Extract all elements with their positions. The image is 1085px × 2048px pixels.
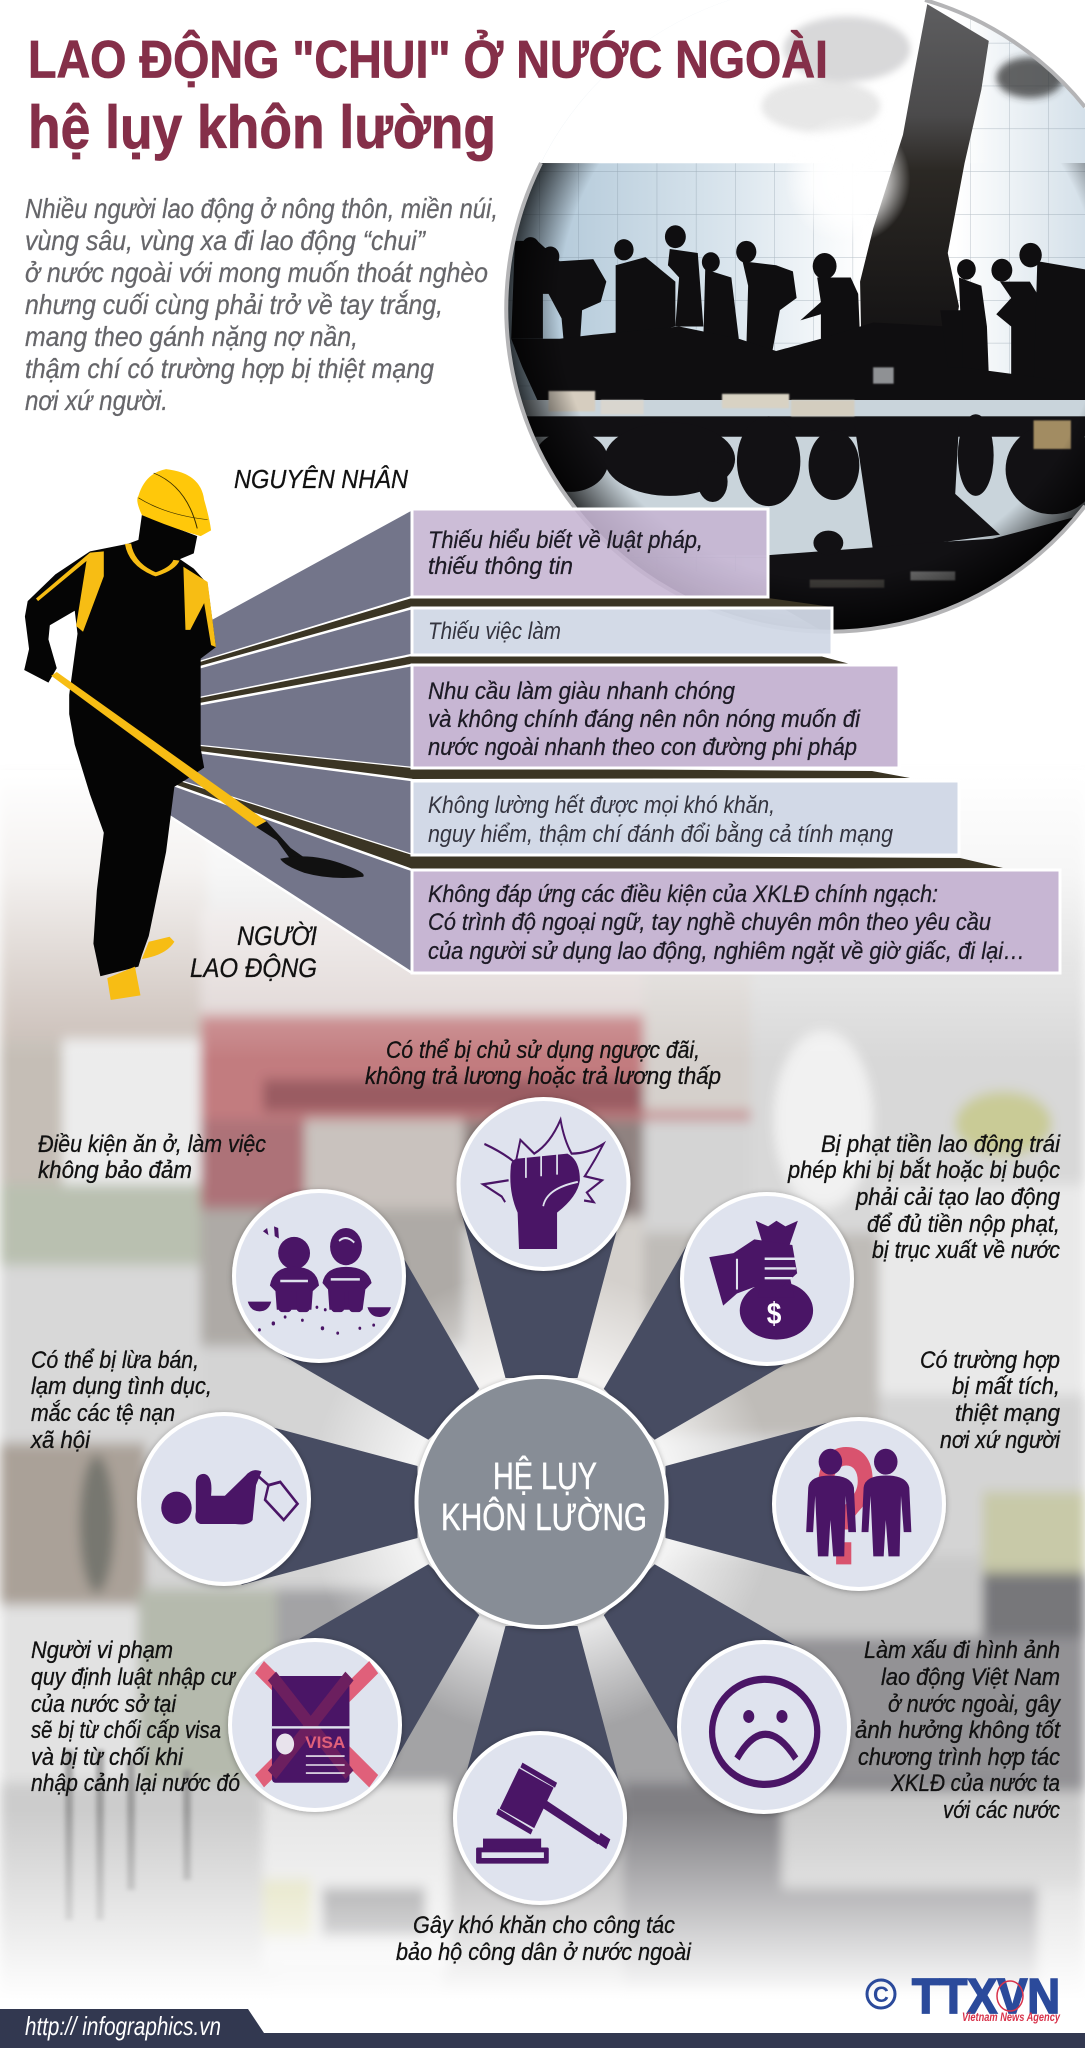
panel: cause box 5 (412, 870, 1060, 973)
logo: TTXVN: C (873, 1982, 889, 2007)
icon: raised fist (483, 1120, 603, 1249)
icon: money bag in hand (709, 1221, 813, 1340)
text: fines: bị trục xuất về nước (872, 1237, 1060, 1264)
icon: rejected visa: VISA (305, 1734, 345, 1752)
panel: cause box 3: và không chính đáng nên nôn nóng muốn đi (428, 706, 861, 733)
icon: two hungry people (248, 1226, 391, 1335)
central circle (416, 1377, 666, 1627)
intro text block: Nhiều người lao động ở nông thôn, miền núi, (25, 193, 498, 224)
text: fines: phải cải tạo lao động (855, 1184, 1061, 1211)
text: national image: chương trình hợp tác (858, 1744, 1060, 1771)
panel: causes rays (160, 509, 1003, 973)
text: trafficking (30, 1347, 212, 1454)
text: living conditions (38, 1131, 266, 1184)
text: abuse by employers (365, 1037, 721, 1090)
circles: icon discs (139, 1099, 944, 1903)
text: visa refusal: Người vi phạm (31, 1637, 173, 1664)
panel: cause box 2 (412, 608, 832, 655)
spokes: consequences (242, 1202, 842, 1802)
background top fade (0, 770, 1085, 1060)
icon: trafficked person with tag (161, 1470, 298, 1524)
text: national image: lao động Việt Nam (881, 1664, 1060, 1691)
icon: sad face (712, 1679, 817, 1784)
text: living conditions: không bảo đảm (38, 1157, 192, 1184)
intro text block: thậm chí có trường hợp bị thiệt mạng (25, 353, 434, 384)
text: fines (787, 1131, 1061, 1264)
text: citizen protection: Gây khó khăn cho công tác (413, 1912, 675, 1939)
text: citizen protection: bảo hộ công dân ở nước ngoài (396, 1939, 692, 1966)
icon: money bag in hand: $ (767, 1297, 781, 1331)
intro text block: nhưng cuối cùng phải trở về tay trắng, (25, 289, 443, 320)
text: fines: phép khi bị bắt hoặc bị buộc (787, 1157, 1060, 1184)
photo: light debris (549, 367, 1071, 588)
background photo: truck scene (0, 780, 1085, 2048)
panel: cause box 4: Không lường hết được mọi khó khăn, (428, 792, 775, 819)
panel: cause box 3: nước ngoài nhanh theo con đường phi pháp (428, 734, 857, 761)
text: visa refusal: quy định luật nhập cư (31, 1664, 237, 1691)
panel: cause box 5: Có trình độ ngoại ngữ, tay nghề chuyên môn theo yêu cầu (428, 909, 991, 936)
icon: rejected visa (260, 1667, 374, 1783)
text: missing or dead: thiệt mạng (955, 1400, 1061, 1427)
heading: worker label: LAO ĐỘNG (190, 952, 317, 983)
panel: cause box 1: thiếu thông tin (428, 553, 573, 580)
photo ring (506, 0, 1085, 632)
light halo behind hub (306, 1267, 776, 1737)
footer bar (0, 2009, 1085, 2048)
photo: sun glow (784, 114, 910, 245)
intro text block (25, 193, 498, 416)
panel: cause box 4 (412, 781, 959, 855)
text: national image: với các nước (943, 1797, 1060, 1824)
background posts (65, 1750, 191, 1920)
central circle: HỆ LỤY (493, 1455, 597, 1498)
text: missing or dead (920, 1347, 1061, 1454)
footer url: http:// infographics.vn (25, 2011, 221, 2041)
panel: cause box 1 (412, 509, 768, 597)
heading: worker label: NGƯỜI (237, 920, 317, 951)
photo: migrants silhouettes in circle (500, 0, 1085, 643)
text: national image: ở nước ngoài, gây (888, 1691, 1062, 1718)
heading: worker label (190, 920, 317, 983)
text: visa refusal (31, 1637, 240, 1797)
panel: cause box 5: của người sử dụng lao động, nghiêm ngặt về giờ giấc, đi lại… (428, 938, 1025, 965)
text: national image: Làm xấu đi hình ảnh (864, 1637, 1060, 1664)
intro text block: nơi xứ người. (25, 385, 168, 416)
bottom white strip (0, 2000, 1085, 2035)
text: fines: để đủ tiền nộp phạt, (867, 1211, 1060, 1238)
central circle: KHÔN LƯỜNG (441, 1495, 647, 1539)
intro text block: ở nước ngoài với mong muốn thoát nghèo (25, 257, 488, 288)
panel: cause box 3: Nhu cầu làm giàu nhanh chóng (428, 678, 736, 705)
panel: cause box 1: Thiếu hiểu biết về luật pháp, (428, 527, 703, 554)
text: missing or dead: nơi xứ người (940, 1427, 1061, 1454)
text: national image: ảnh hưởng không tốt (855, 1717, 1061, 1744)
text: visa refusal: và bị từ chối khi (31, 1744, 184, 1771)
text: trafficking: Có thể bị lừa bán, (31, 1347, 199, 1374)
icon: two people with question mark: ? (813, 1413, 879, 1601)
text: living conditions: Điều kiện ăn ở, làm việc (38, 1131, 266, 1158)
text: missing or dead: bị mất tích, (952, 1373, 1060, 1400)
title (28, 28, 828, 161)
panel: cause box 3 (412, 665, 899, 768)
text: trafficking: lạm dụng tình dục, (31, 1373, 212, 1400)
text: abuse by employers: không trả lương hoặc trả lương thấp (365, 1063, 721, 1090)
panel: cause box 2: Thiếu việc làm (428, 618, 561, 645)
text: trafficking: xã hội (30, 1427, 91, 1454)
panel: cause box 5: Không đáp ứng các điều kiện của XKLĐ chính ngạch: (428, 881, 938, 908)
intro text block: mang theo gánh nặng nợ nần, (25, 321, 358, 352)
panel: cause box 4: nguy hiểm, thậm chí đánh đổi bằng cả tính mạng (428, 821, 894, 848)
icon: worker with shovel (24, 469, 364, 1000)
icon: gavel (476, 1763, 610, 1864)
title: hệ lụy khôn lường (28, 94, 496, 161)
logo: TTXVN: TTXVN (912, 1970, 1060, 2024)
text: missing or dead: Có trường hợp (920, 1347, 1060, 1374)
text: abuse by employers: Có thể bị chủ sử dụng ngược đãi, (386, 1037, 700, 1064)
background bottom fade (0, 1810, 1085, 2000)
photo: tree trunk (860, 4, 989, 326)
text: national image: XKLĐ của nước ta (890, 1770, 1060, 1797)
text: visa refusal: sẽ bị từ chối cấp visa (31, 1717, 221, 1744)
text: citizen protection (396, 1912, 692, 1966)
text: national image (855, 1637, 1062, 1824)
photo: water and reflections (522, 400, 1085, 555)
title: LAO ĐỘNG "CHUI" Ở NƯỚC NGOÀI (28, 28, 828, 90)
text: fines: Bị phạt tiền lao động trái (821, 1131, 1061, 1158)
photo: tree canopy (761, 16, 1063, 133)
text: visa refusal: của nước sở tại (31, 1691, 177, 1718)
photo: people silhouettes (511, 225, 1085, 424)
intro text block: vùng sâu, vùng xa đi lao động “chui” (25, 225, 426, 256)
text: visa refusal: nhập cảnh lại nước đó (31, 1770, 240, 1797)
text: trafficking: mắc các tệ nạn (31, 1400, 175, 1427)
heading: causes: NGUYÊN NHÂN (234, 464, 408, 494)
